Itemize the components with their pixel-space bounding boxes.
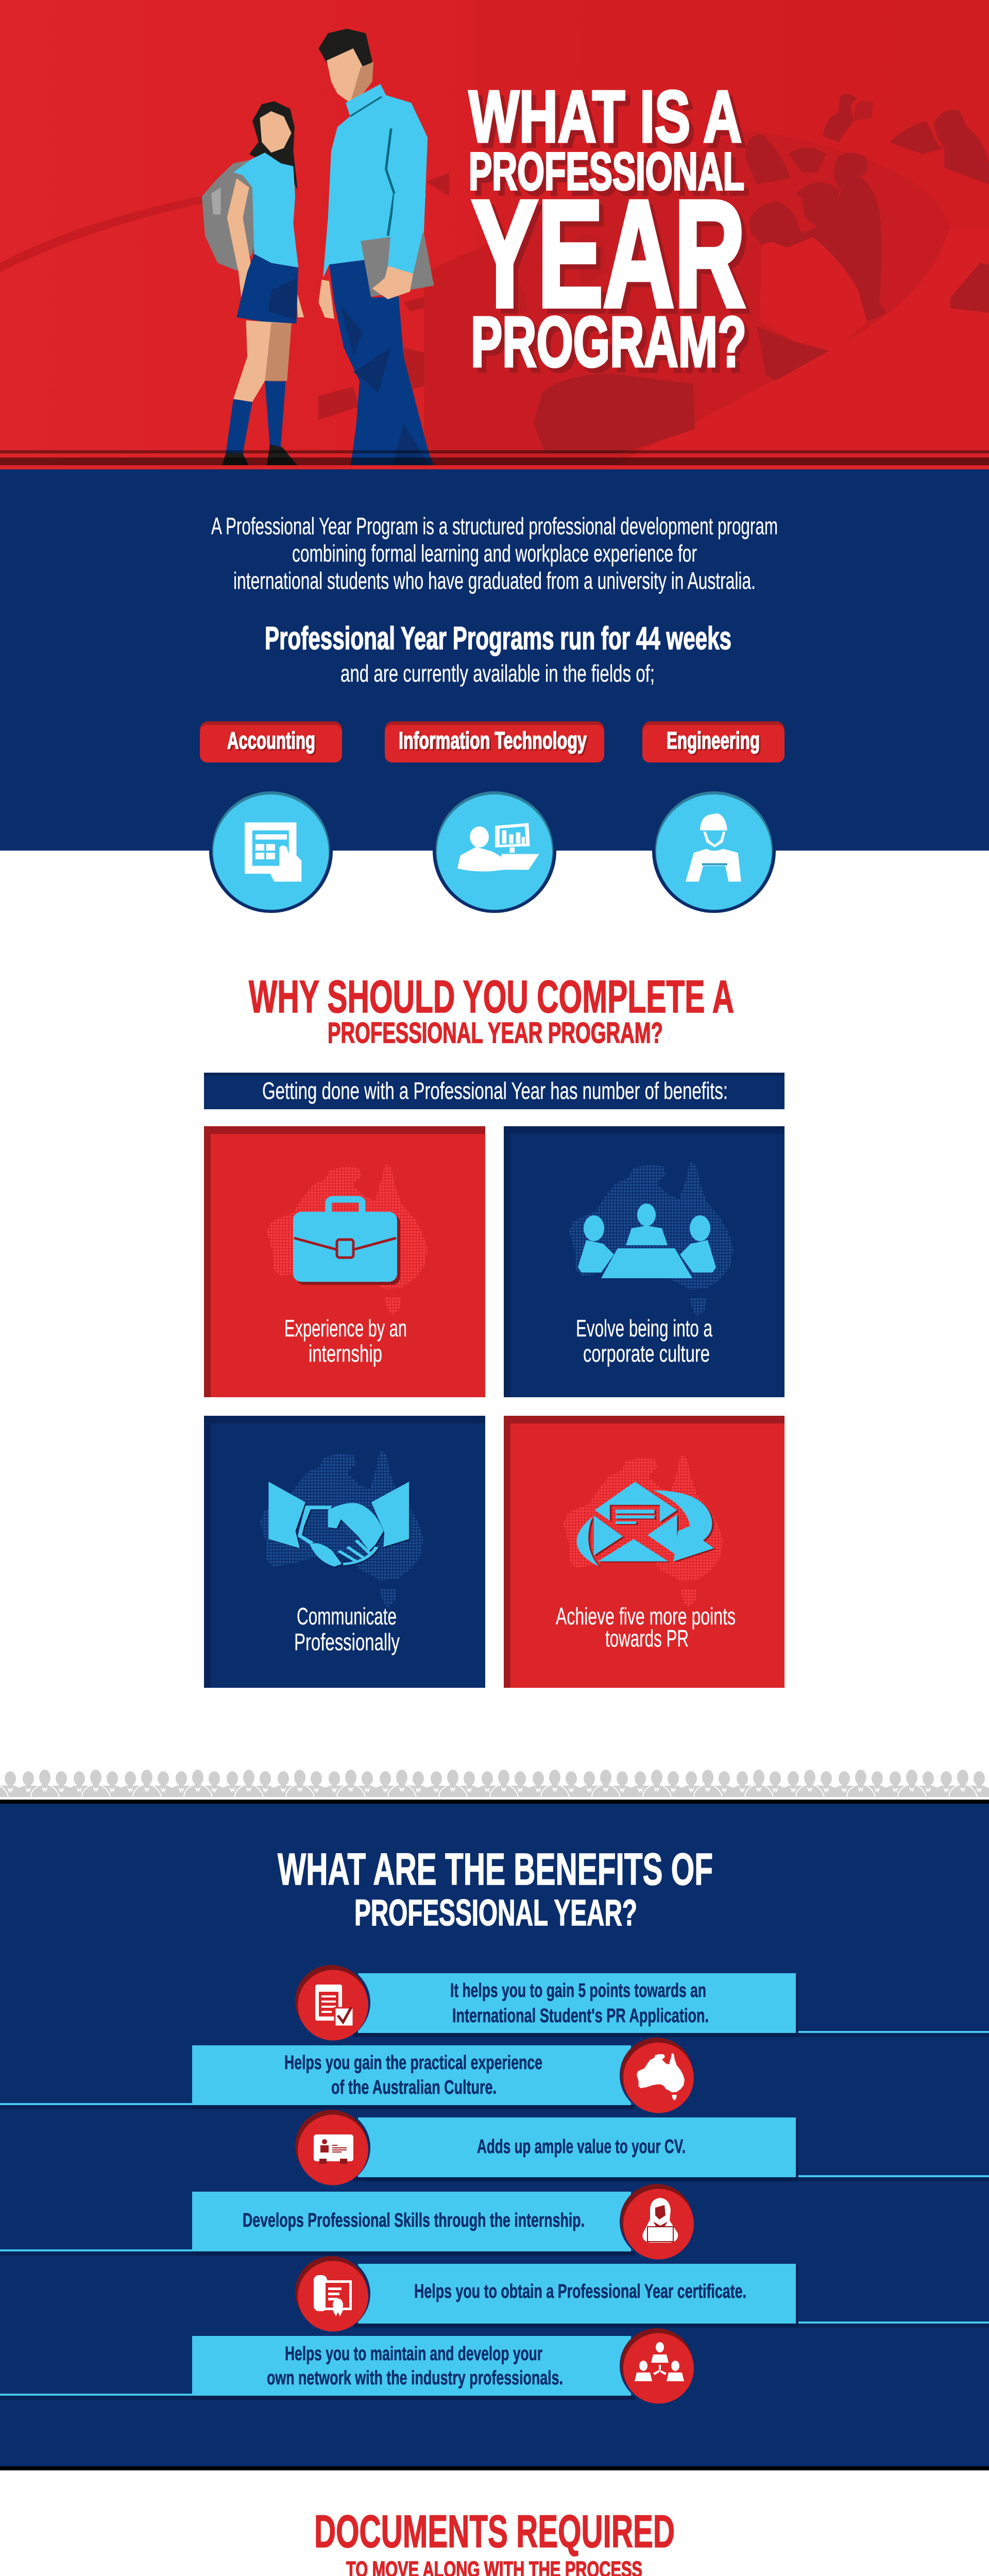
benefits heading: PROFESSIONAL YEAR? xyxy=(354,1893,637,1934)
hero title: PROGRAM? xyxy=(471,302,746,382)
benefit 1 xyxy=(294,1964,989,2041)
duration statement: Professional Year Programs run for 44 weeks xyxy=(265,621,731,656)
hero bottom stripes xyxy=(0,450,989,469)
benefit 3 xyxy=(294,2109,989,2185)
icon: information technology circle xyxy=(433,789,556,913)
button: information technology: Information Technology xyxy=(399,727,587,754)
benefits heading: WHAT ARE THE BENEFITS OF xyxy=(278,1844,713,1894)
heading: why should you complete xyxy=(249,971,734,1049)
heading: why should you complete: WHY SHOULD YOU COMPLETE A xyxy=(249,971,734,1022)
card text: Professionally xyxy=(294,1629,400,1655)
hero title: PROFESSIONAL xyxy=(469,142,744,201)
panel: benefits of professional year xyxy=(0,1804,989,2466)
benefit 2: Helps you gain the practical experience xyxy=(284,2052,542,2074)
map: Australia dots xyxy=(260,1451,423,1607)
icon: woman with laptop xyxy=(643,2198,678,2243)
hero title: WHAT IS A xyxy=(469,76,742,158)
icon: briefcase xyxy=(293,1199,400,1285)
heading: why should you complete: PROFESSIONAL YEAR PROGRAM? xyxy=(328,1016,663,1049)
button: information technology xyxy=(385,721,604,762)
heading: documents required xyxy=(314,2505,675,2576)
panel: PR points card xyxy=(504,1416,785,1688)
black rule top of benefits xyxy=(0,1800,989,1804)
icon: Australia xyxy=(637,2053,685,2100)
benefit 6 xyxy=(0,2328,696,2404)
card text: corporate culture xyxy=(583,1340,710,1367)
panel: corporate culture card xyxy=(504,1126,785,1397)
icon: certificate xyxy=(314,2275,352,2316)
button: accounting xyxy=(200,721,342,762)
benefits banner: Getting done with a Professional Year has number of benefits: xyxy=(262,1077,728,1104)
intro paragraph: international students who have graduated from a university in Australia. xyxy=(233,567,756,594)
woman figure xyxy=(202,101,304,469)
card text xyxy=(284,1315,407,1367)
icon: envelope xyxy=(576,1482,714,1567)
card text xyxy=(294,1603,400,1655)
fields intro: and are currently available in the fields of; xyxy=(340,660,655,687)
map: Australia dots xyxy=(267,1164,428,1315)
icon: network xyxy=(635,2342,684,2381)
icon: CV card xyxy=(314,2134,353,2164)
card text: Experience by an xyxy=(284,1315,407,1342)
card text xyxy=(556,1603,736,1652)
icon: accounting circle xyxy=(209,789,333,913)
hero title xyxy=(469,76,746,382)
icon: engineering circle xyxy=(652,789,776,913)
panel: internship card xyxy=(204,1126,485,1397)
icon: handshake xyxy=(268,1482,409,1567)
hero classroom background silhouettes xyxy=(0,0,989,469)
button: engineering xyxy=(642,721,785,762)
card text: towards PR xyxy=(605,1625,689,1652)
benefit 2: of the Australian Culture. xyxy=(331,2077,497,2098)
button: accounting: Accounting xyxy=(227,727,315,754)
benefit 1: International Student's PR Application. xyxy=(452,2005,709,2027)
man figure xyxy=(318,29,436,471)
black rule bottom of benefits xyxy=(0,2466,989,2470)
benefit 4: Develops Professional Skills through the internship. xyxy=(243,2210,585,2231)
icon: clipboard xyxy=(315,1985,353,2026)
panel: communicate card xyxy=(204,1416,485,1688)
map: Australia dots xyxy=(569,1162,734,1316)
card text xyxy=(576,1315,712,1367)
benefit 3: Adds up ample value to your CV. xyxy=(477,2136,686,2158)
benefit 6: own network with the industry professionals. xyxy=(267,2367,563,2389)
hero panel xyxy=(0,0,989,471)
card text: Evolve being into a xyxy=(576,1315,712,1342)
benefits heading xyxy=(278,1844,713,1934)
panel: introduction xyxy=(0,469,989,851)
crowd divider xyxy=(0,1770,989,1797)
intro paragraph: combining formal learning and workplace experience for xyxy=(292,540,697,567)
intro paragraph xyxy=(211,513,778,594)
icon: meeting xyxy=(578,1204,716,1278)
card text: internship xyxy=(309,1340,382,1367)
benefit 2 xyxy=(0,2037,696,2113)
card text: Communicate xyxy=(297,1603,397,1630)
button: engineering: Engineering xyxy=(667,727,760,754)
benefit 6: Helps you to maintain and develop your xyxy=(285,2343,542,2365)
benefit 1: It helps you to gain 5 points towards an xyxy=(450,1980,706,2002)
benefit 5 xyxy=(294,2256,989,2332)
heading: documents required: DOCUMENTS REQUIRED xyxy=(314,2505,675,2557)
benefits banner xyxy=(204,1073,785,1109)
benefit 5: Helps you to obtain a Professional Year certificate. xyxy=(414,2281,746,2302)
card text: Achieve five more points xyxy=(556,1603,736,1630)
hero title: YEAR xyxy=(472,170,745,338)
map: Australia dots xyxy=(563,1455,723,1607)
benefit 4 xyxy=(0,2183,696,2260)
